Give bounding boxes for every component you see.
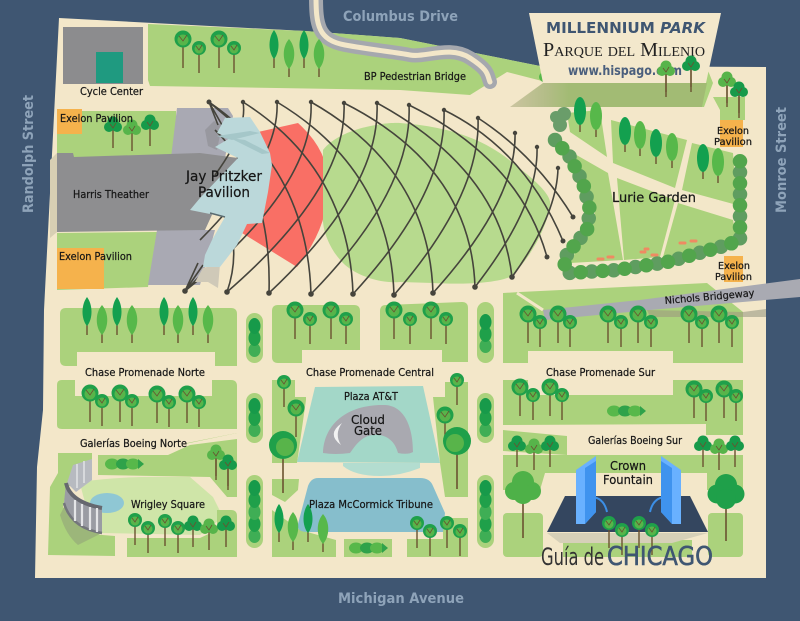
Pritzker trellis cables	[185, 102, 573, 295]
subtitle: Parque del Milenio: Parque del Milenio	[543, 39, 705, 61]
trees: Chase Promenade Sur	[512, 306, 743, 421]
label: Exelon Pavilion northeast: Exelon	[717, 126, 749, 137]
panel: Chase Promenade Sur south lawn	[503, 380, 743, 435]
sign shadow band	[510, 68, 713, 107]
panel: Plaza AT&T	[297, 386, 440, 476]
label: Nichols Bridgeway: Nichols Bridgeway	[664, 288, 755, 307]
Harris Theater building	[50, 121, 238, 238]
label: Harris Theather: Harris Theather	[73, 189, 150, 201]
label: Chase Promenade Sur: Chase Promenade Sur	[546, 367, 656, 379]
label: Plaza AT&T: Plaza AT&T	[344, 391, 399, 403]
label: Jay Pritzker Pavilion: Jay Pritzker	[185, 169, 262, 185]
panel: Plaza McCormick Tribune	[298, 478, 445, 532]
panel: Crown Fountain gardens	[503, 430, 743, 557]
website: www.hispago.com	[568, 64, 682, 79]
Lurie Garden hedge top cluster	[550, 107, 571, 132]
title: Millennium Park: MILLENNIUM PARK	[546, 19, 706, 37]
Nichols Bridgeway	[517, 279, 800, 320]
panel: Lurie Garden beds	[567, 97, 745, 263]
road label: Monroe Street: Monroe Street	[774, 107, 790, 213]
panel: Chase Promenade Central lawns	[272, 302, 468, 557]
label: Exelon Pavilion northwest: Exelon Pavilion	[60, 113, 133, 125]
Great Lawn	[323, 123, 550, 284]
label: Galerías Boeing Norte: Galerías Boeing Norte	[80, 438, 187, 450]
Galerías Boeing Sur walkway	[567, 425, 706, 455]
panel: Cycle Center building	[63, 27, 143, 84]
road label: Columbus Drive: Columbus Drive	[343, 9, 458, 25]
Cloud Gate sculpture	[323, 405, 413, 454]
label: Lurie Garden: Lurie Garden	[612, 190, 696, 206]
label: Plaza McCormick Tribune: Plaza McCormick Tribune	[309, 499, 433, 511]
trees: Wrigley Square	[128, 513, 235, 553]
Lurie Garden flowers	[598, 241, 696, 259]
logo: Guía de Chicago: Guía de	[541, 543, 604, 571]
Galerías Boeing Norte cream walkway	[92, 429, 237, 455]
road label: Randolph Street: Randolph Street	[21, 95, 37, 213]
trees: Crown Fountain	[505, 471, 744, 555]
small hedges	[105, 72, 646, 554]
title sign	[529, 13, 721, 83]
label: Chase Promenade Central: Chase Promenade Central	[306, 367, 434, 379]
road label: Michigan Avenue: Michigan Avenue	[338, 591, 464, 607]
label: Chase Promenade Norte: Chase Promenade Norte	[85, 367, 205, 379]
trees: north lawn and sign	[104, 30, 748, 151]
label: Exelon Pavilion northeast: Pavilion	[714, 137, 752, 148]
panel: north lawn and BP bridge green	[148, 24, 546, 95]
trees: Boeing galleries	[207, 436, 744, 490]
pavilion stage roofs	[148, 108, 233, 285]
east Exelon pavilions	[720, 120, 743, 282]
label: Crown Fountain: Fountain	[603, 472, 653, 487]
panel: Galerías Boeing Norte lawn	[98, 439, 237, 497]
panel: Chase Promenade Norte lawns	[57, 308, 237, 445]
label: Cloud Gate: Cloud	[351, 412, 385, 427]
Crown Fountain plaza	[547, 496, 708, 543]
red seating area	[242, 123, 328, 267]
label: Galerías Boeing Sur: Galerías Boeing Sur	[588, 435, 683, 447]
label: Crown Fountain: Crown	[610, 458, 646, 473]
label: Cycle Center: Cycle Center	[80, 86, 144, 98]
label: Jay Pritzker Pavilion: Pavilion	[198, 185, 250, 201]
Wrigley Square colonnade	[64, 459, 102, 533]
BP Pedestrian Bridge	[316, 0, 490, 82]
trees: Lurie Garden	[574, 97, 724, 183]
logo: Guía de Chicago: CHICAGO	[607, 542, 713, 572]
panel: Chase Promenade Sur north lawn	[503, 283, 743, 363]
panel: west gardens	[57, 109, 176, 290]
trees: Plaza McCormick	[274, 504, 467, 556]
trees: Chase Promenade Norte	[82, 297, 213, 427]
Crown Fountain towers	[576, 456, 681, 524]
trellis anchors	[182, 100, 575, 298]
label: Wrigley Square: Wrigley Square	[131, 499, 205, 511]
label: Cloud Gate: Gate	[354, 423, 382, 438]
label: BP Pedestrian Bridge: BP Pedestrian Bridge	[364, 71, 466, 83]
label: Exelon Pavilion southeast: Exelon	[718, 261, 750, 272]
panel: Wrigley Square	[48, 453, 237, 557]
label: Exelon Pavilion southeast: Pavilion	[715, 272, 752, 283]
label: Exelon Pavilion southwest: Exelon Pavilion	[59, 251, 132, 263]
Jay Pritzker Pavilion shell	[190, 117, 272, 288]
Lurie Garden hedge	[555, 140, 740, 273]
trees: Chase Promenade Central	[269, 302, 471, 493]
walkway hedge capsules	[246, 302, 494, 548]
